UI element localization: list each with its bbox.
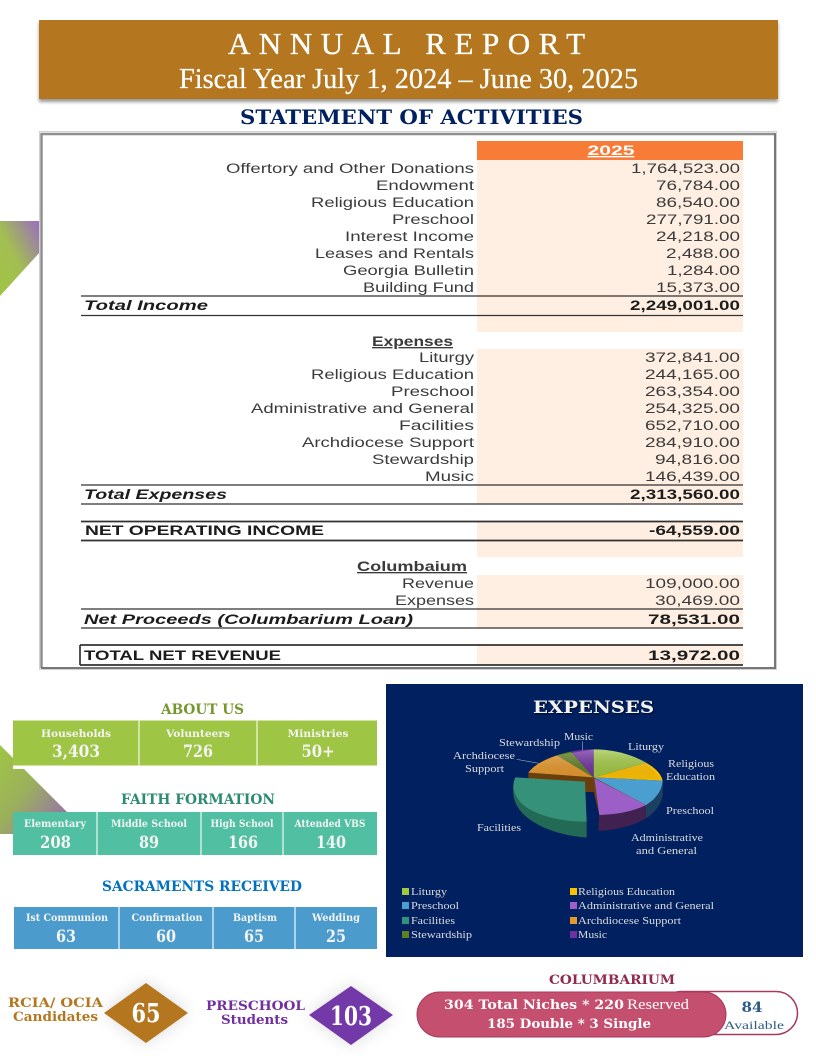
banner: annual report title: Fiscal Year July 1, 2024 – June 30, 2025: [179, 63, 638, 95]
income values: [631, 161, 740, 295]
stat tiles: sacraments: 65: [244, 927, 264, 947]
columbarium rows: 109,000.00: [645, 576, 740, 591]
chart legend: Music: [578, 929, 607, 941]
pill: available: [660, 992, 798, 1034]
chart legend: Preschool: [411, 900, 459, 912]
stat tiles: about us: 3,403: [52, 742, 100, 762]
stat tiles: sacraments: Confirmation: [132, 913, 203, 924]
net operating income row: [85, 523, 740, 538]
income values: 76,784.00: [656, 178, 740, 193]
total net revenue row: TOTAL NET REVENUE: [84, 648, 281, 663]
columbarium rows: 30,469.00: [655, 593, 740, 608]
stat tiles: sacraments: 63: [56, 927, 76, 947]
stat tiles: faith formation: High School: [210, 819, 274, 830]
expenses labels: Music: [425, 469, 474, 484]
stat tiles: sacraments: Wedding: [311, 913, 360, 924]
stat tiles: about us: [13, 720, 377, 769]
banner: annual report title: ANNUAL REPORT: [228, 26, 585, 61]
expenses values: [645, 350, 740, 484]
stat tiles: about us: 50+: [302, 742, 334, 762]
stat tiles: sacraments: 60: [156, 927, 176, 947]
stat tiles: faith formation: Middle School: [111, 819, 187, 830]
stat tiles: faith formation: 166: [228, 833, 258, 853]
total expenses row: Total Expenses: [84, 487, 228, 502]
stat tiles: faith formation: Elementary: [24, 819, 87, 830]
heading: faith formation: FAITH FORMATION: [121, 792, 275, 808]
income values: 2,488.00: [666, 246, 740, 261]
peach value column: [477, 160, 743, 665]
stat tiles: faith formation: 140: [316, 833, 346, 853]
pie slice labels: Liturgy: [628, 741, 665, 753]
expenses labels: Facilities: [399, 418, 474, 433]
stat tiles: faith formation: 89: [139, 833, 159, 853]
column header 2025: [477, 141, 743, 160]
net proceeds row: [84, 612, 740, 627]
pill: available: 84: [742, 1000, 763, 1016]
expenses labels: Preschool: [391, 384, 474, 399]
heading: about us: ABOUT US: [160, 702, 244, 718]
expenses values: 284,910.00: [645, 435, 740, 450]
panel: faith formation: [13, 792, 377, 855]
diamond: 103: 103: [330, 1002, 372, 1032]
pie slice labels: Education: [666, 771, 716, 783]
stat: RCIA / OCIA candidates: [8, 983, 188, 1043]
income values: 1,764,523.00: [631, 161, 740, 176]
stat tiles: faith formation: 208: [40, 833, 71, 853]
heading: statement of activities: STATEMENT OF ACTIVITIES: [240, 105, 583, 129]
chart legend: [402, 886, 714, 941]
income values: 15,373.00: [656, 280, 740, 295]
expenses labels: Liturgy: [419, 350, 474, 365]
stat: RCIA / OCIA candidates: Candidates: [13, 1010, 98, 1025]
expenses values: 146,439.00: [645, 469, 740, 484]
panel: expenses pie chart: [386, 684, 803, 957]
decorative triangle: upper left: [0, 221, 40, 296]
banner: annual report title: [39, 20, 778, 102]
pie slice labels: Archdiocese: [453, 750, 515, 762]
expenses labels: Archdiocese Support: [302, 435, 474, 450]
total income row: Total Income: [84, 298, 209, 313]
total expenses row: [84, 487, 740, 502]
stat tiles: sacraments: Ist Communion: [26, 913, 109, 924]
diamond: 103: [309, 986, 393, 1045]
decorative triangle: lower left: [0, 745, 67, 834]
pie slice labels: [453, 731, 716, 857]
panel: statement of activities table: [40, 132, 776, 670]
income labels: [226, 161, 474, 295]
income labels: Leases and Rentals: [315, 246, 474, 261]
net proceeds row: 78,531.00: [648, 612, 740, 627]
income values: 1,284.00: [667, 263, 740, 278]
income labels: Interest Income: [345, 229, 474, 244]
expenses labels: Administrative and General: [251, 401, 474, 416]
stat tiles: faith formation: [13, 812, 377, 855]
pill: total niches: Reserved: [627, 997, 690, 1013]
stat: preschool students: PRESCHOOL: [206, 999, 305, 1014]
stat: preschool students: [206, 986, 393, 1045]
diamond: 65: [104, 983, 188, 1043]
income labels: Georgia Bulletin: [343, 263, 474, 278]
chart legend: Liturgy: [411, 886, 448, 898]
pill: total niches: 304 Total Niches * 220: [444, 998, 624, 1013]
chart title: EXPENSES: [533, 698, 654, 718]
stat tiles: about us: Volunteers: [165, 728, 230, 740]
expenses values: 372,841.00: [645, 350, 740, 365]
stat tiles: sacraments: [14, 907, 377, 949]
chart legend: Administrative and General: [578, 900, 714, 912]
expenses values: 263,354.00: [645, 384, 740, 399]
net operating income row: NET OPERATING INCOME: [85, 523, 324, 538]
income labels: Religious Education: [311, 195, 474, 210]
income labels: Building Fund: [363, 280, 474, 295]
pill: available: Available: [724, 1018, 784, 1032]
stat: preschool students: Students: [221, 1013, 288, 1028]
pie slice labels: Stewardship: [499, 737, 561, 749]
total net revenue row: [84, 648, 740, 663]
expenses values: 254,325.00: [645, 401, 740, 416]
column header 2025: 2025: [588, 143, 635, 158]
stat tiles: sacraments: Baptism: [233, 913, 277, 924]
income values: 24,218.00: [656, 229, 740, 244]
heading: sacraments received: SACRAMENTS RECEIVED: [102, 879, 302, 895]
expenses labels: [251, 334, 474, 484]
panel: sacraments received: [14, 879, 377, 949]
pie slice labels: Religious: [668, 758, 714, 770]
pie slice labels: Facilities: [477, 822, 521, 834]
expenses values: 244,165.00: [645, 367, 740, 382]
chart legend: Archdiocese Support: [578, 915, 681, 927]
total expenses row: 2,313,560.00: [630, 487, 740, 502]
rule lines: [80, 296, 743, 665]
income labels: Endowment: [376, 178, 474, 193]
stat tiles: faith formation: Attended VBS: [294, 819, 366, 830]
pie slice labels: Support: [465, 763, 504, 775]
diamond: 65: 65: [132, 999, 160, 1029]
pill: total niches: 185 Double * 3 Single: [487, 1017, 651, 1032]
3D pie: [513, 741, 663, 838]
income values: 86,540.00: [656, 195, 740, 210]
columbarium rows: [357, 559, 740, 608]
panel: about us: [13, 702, 377, 769]
columbarium rows: Revenue: [402, 576, 474, 591]
pie slice labels: Preschool: [666, 805, 714, 817]
total income row: [84, 298, 740, 313]
expenses values: 94,816.00: [655, 452, 740, 467]
expenses labels: Stewardship: [372, 452, 474, 467]
income labels: Preschool: [392, 212, 474, 227]
pie slice labels: Music: [564, 731, 593, 743]
expenses labels: Expenses: [372, 334, 453, 349]
pill: total niches: [417, 992, 726, 1037]
net proceeds row: Net Proceeds (Columbarium Loan): [84, 612, 414, 627]
net operating income row: -64,559.00: [649, 523, 740, 538]
heading: columbarium: COLUMBARIUM: [549, 973, 675, 988]
expenses labels: Religious Education: [311, 367, 474, 382]
chart legend: Stewardship: [411, 929, 473, 941]
stat tiles: sacraments: 25: [326, 927, 346, 947]
chart legend: Facilities: [411, 915, 455, 927]
stat tiles: about us: 726: [183, 742, 213, 762]
pie slice labels: Administrative: [631, 832, 703, 844]
total income row: 2,249,001.00: [630, 298, 740, 313]
income values: 277,791.00: [646, 212, 740, 227]
panel: columbarium: [417, 973, 798, 1037]
columbarium rows: Expenses: [395, 593, 474, 608]
stat: RCIA / OCIA candidates: RCIA/ OCIA: [8, 996, 104, 1011]
expenses values: 652,710.00: [645, 418, 740, 433]
stat tiles: about us: Ministries: [288, 728, 349, 740]
income labels: Offertory and Other Donations: [226, 161, 474, 176]
chart legend: Religious Education: [578, 886, 676, 898]
columbarium rows: Columbaium: [357, 559, 467, 574]
total net revenue row: 13,972.00: [648, 648, 740, 663]
pie slice labels: and General: [636, 845, 697, 857]
stat tiles: about us: Households: [41, 728, 111, 740]
